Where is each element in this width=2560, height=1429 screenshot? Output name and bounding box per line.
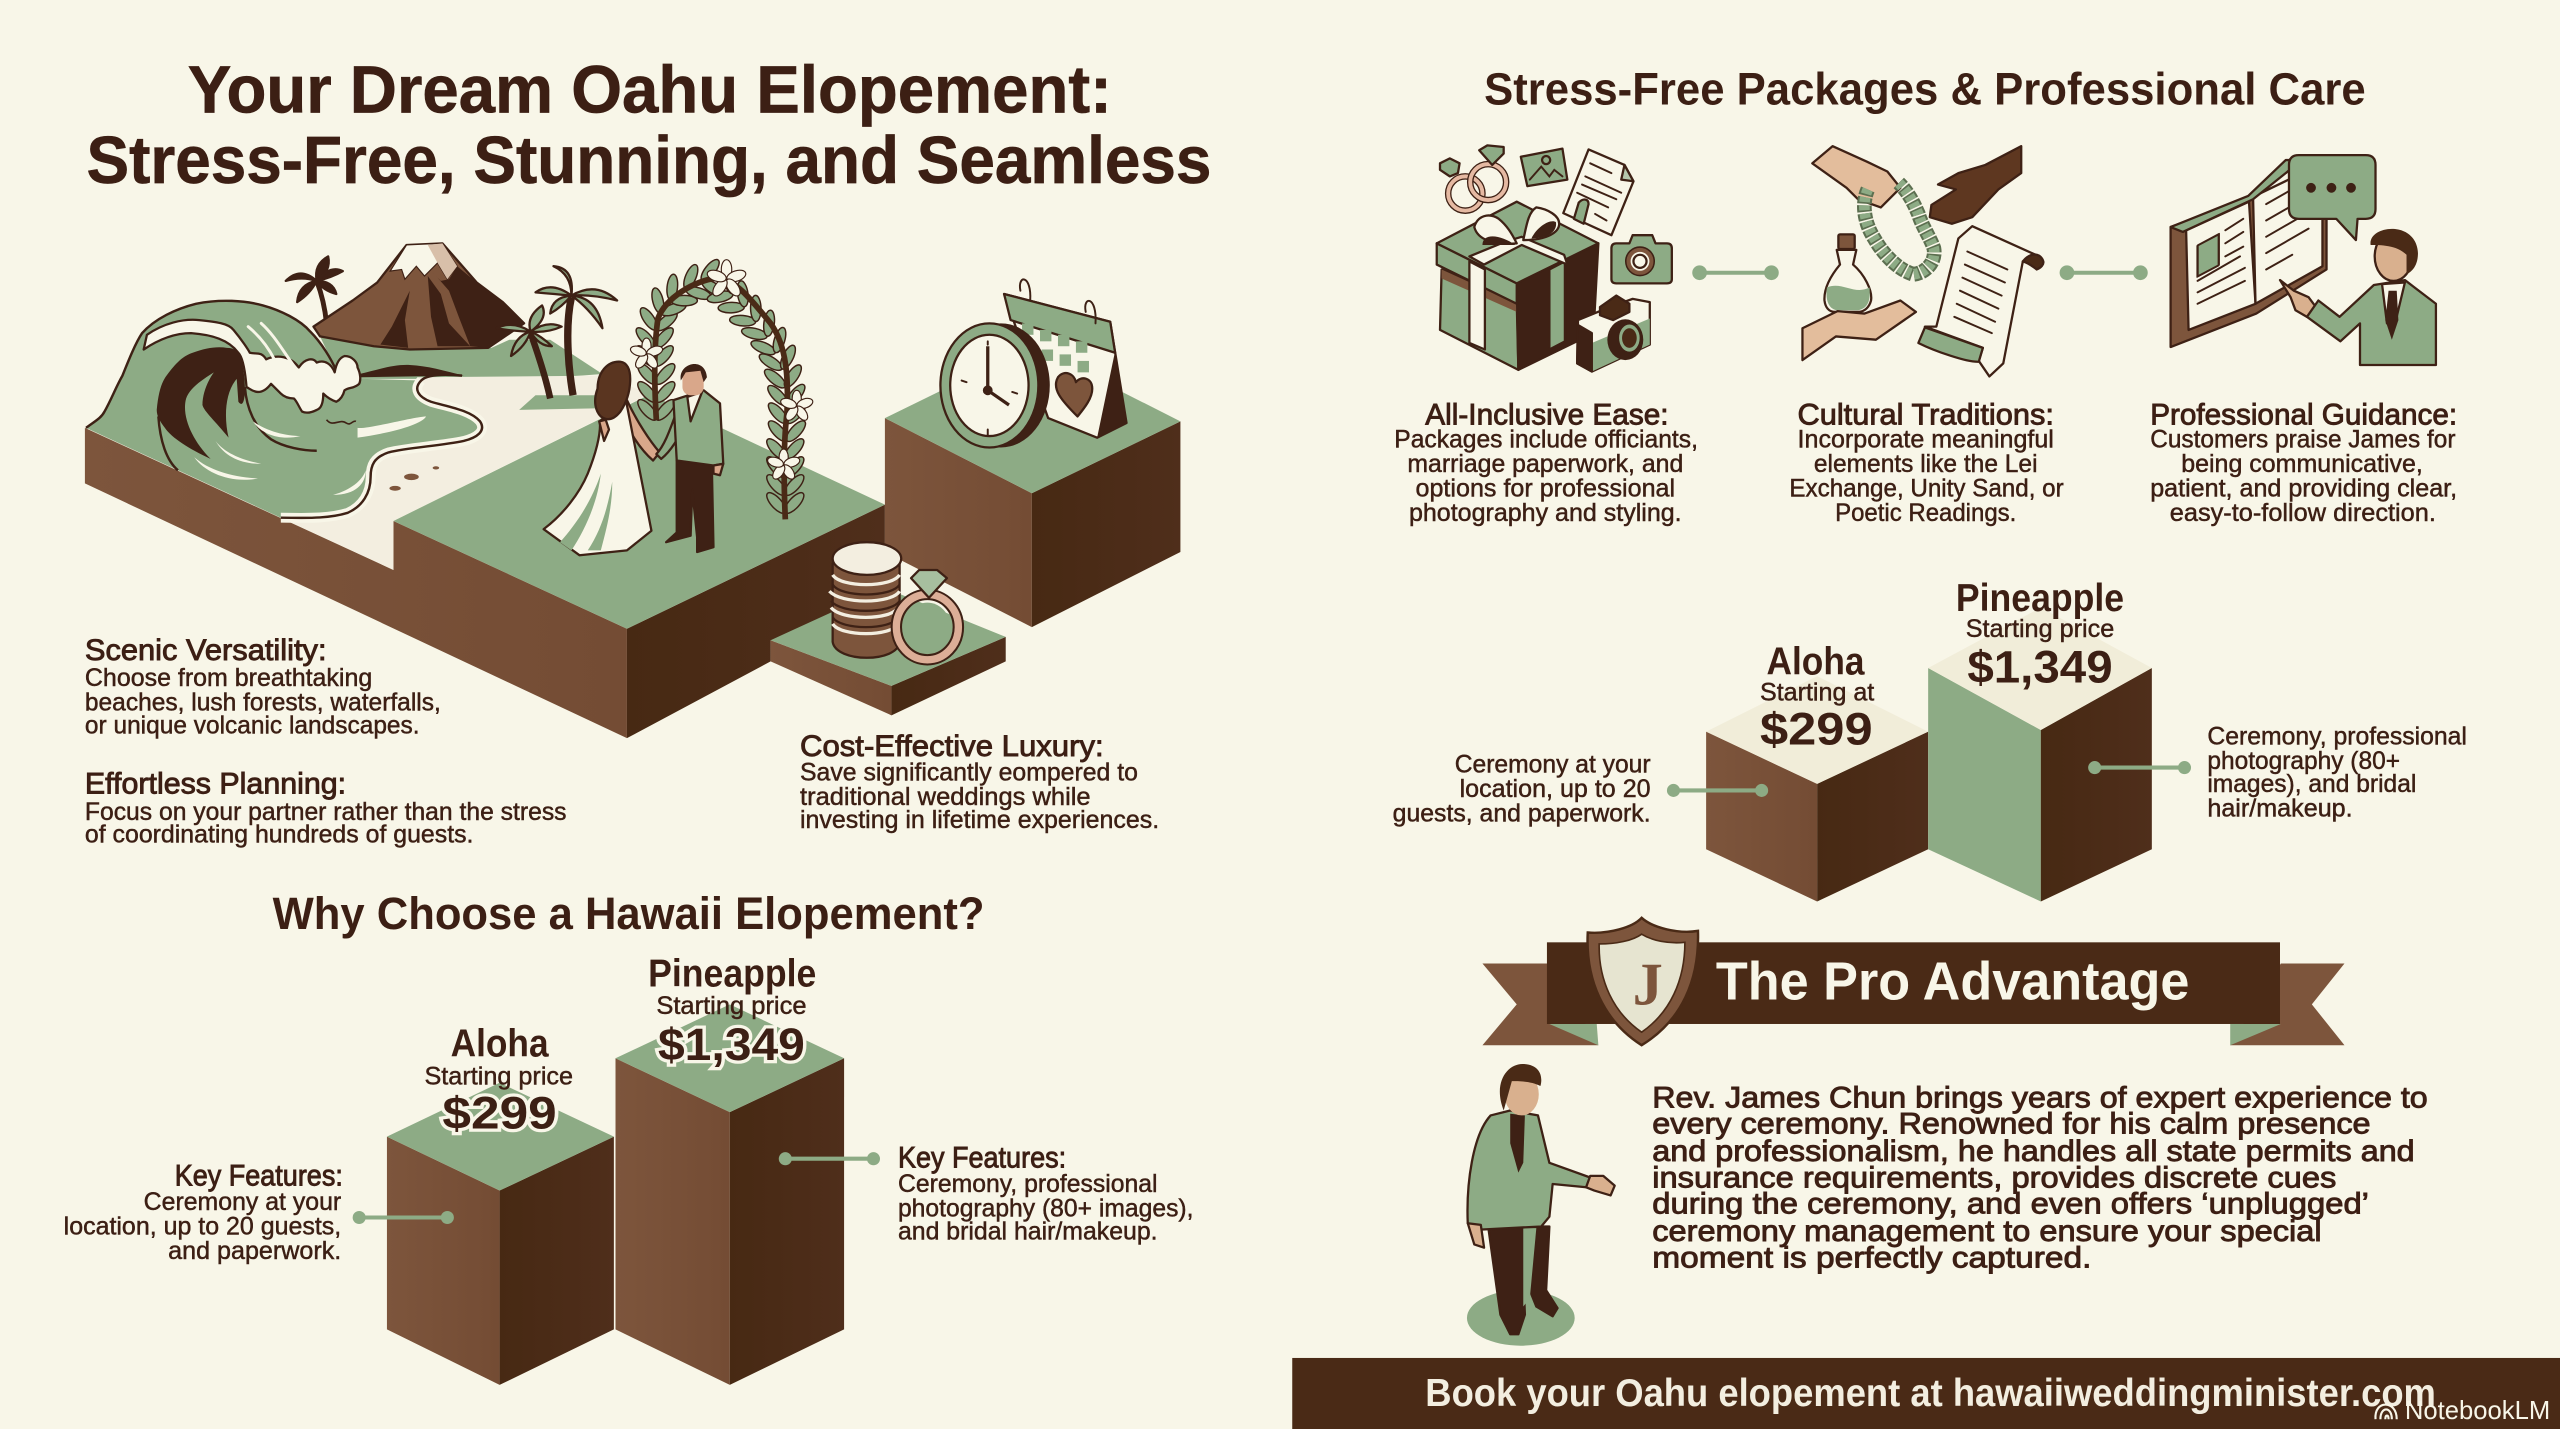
icon group: open book and guide (2171, 155, 2436, 365)
green lawn (393, 394, 885, 629)
text: Aloha key features: location, up to 20 guests, (64, 1213, 341, 1241)
icon group: gift, rings, photo, document, cameras (1437, 145, 1672, 372)
bride (544, 362, 660, 555)
icon: J shield: J (1633, 951, 1663, 1018)
text: All-Inclusive Ease: options for professional (1416, 474, 1675, 502)
pebbles (389, 466, 439, 491)
floral arch (629, 256, 814, 519)
palm patch (519, 395, 601, 410)
bar: Aloha (right): Starting at (1760, 679, 1874, 707)
text: Cultural Traditions: Incorporate meaningful (1798, 425, 2054, 453)
shoreline (281, 375, 482, 518)
text: Cultural Traditions: elements like the Lei (1814, 450, 2038, 478)
lei (1864, 183, 1934, 274)
text: Effortless Planning: Focus on your partner rather than the stress (85, 798, 567, 826)
banner: The Pro Advantage: The Pro Advantage (1716, 951, 2189, 1011)
text: Cultural Traditions (1789, 399, 2064, 527)
text: Cost-Effective Luxury (800, 730, 1159, 834)
text: Pro Advantage paragraph: and professionalism, he handles all state permits and (1652, 1135, 2415, 1168)
icon: wedding rings (1440, 145, 1506, 211)
groom (656, 364, 723, 552)
wave (86, 301, 426, 495)
icon: photo (1521, 149, 1567, 186)
text: Effortless Planning (85, 768, 567, 849)
figure: guide (2280, 229, 2436, 365)
text: right Pineapple features: images), and bridal (2207, 770, 2416, 798)
icon: document (1563, 149, 1633, 235)
text: right Pineapple features: photography (80+ (2207, 747, 2400, 775)
bar: Aloha (left): Starting price (424, 1062, 573, 1090)
text: Cost-Effective Luxury: Save significantly eompered to (800, 759, 1138, 787)
title (87, 53, 1211, 198)
hand: receiving dark (1930, 146, 2021, 224)
text: Scenic Versatility: Scenic Versatility: (85, 634, 327, 667)
connector: Aloha features (353, 1211, 454, 1224)
text: All-Inclusive Ease (1394, 399, 1698, 527)
icon: J shield (1588, 918, 1698, 1045)
text: Aloha key features: and paperwork. (168, 1237, 341, 1265)
text: All-Inclusive Ease: All-Inclusive Ease: (1425, 399, 1669, 432)
text: Effortless Planning: of coordinating hundreds of guests. (85, 821, 473, 849)
sand (281, 376, 650, 570)
connector: right Pineapple (2088, 761, 2191, 774)
figure: Rev. James Chun (1467, 1064, 1615, 1346)
text: Professional Guidance: patient, and providing clear, (2150, 474, 2457, 502)
icon: coin stack (829, 542, 901, 658)
platform left face (85, 428, 627, 738)
text: Professional Guidance (2150, 399, 2457, 527)
heading: why choose: Why Choose a Hawaii Elopement? (273, 888, 984, 939)
watermark: NotebookLM: NotebookLM (2405, 1395, 2550, 1425)
bar: Aloha (right): $299 (1760, 704, 1873, 755)
text: Pineapple key features: photography (80+ images), (898, 1195, 1193, 1223)
text: Pro Advantage paragraph: moment is perfectly captured. (1652, 1241, 2091, 1274)
text: right Aloha features: location, up to 20 (1460, 775, 1651, 803)
bar: Aloha (left): $299 (442, 1087, 557, 1139)
icon: big camera (1577, 296, 1650, 372)
connector: right Aloha (1667, 784, 1768, 797)
icon: small camera (1611, 235, 1672, 283)
connector 2 (2060, 265, 2148, 280)
small platform with coins and ring (771, 542, 1006, 715)
text: Pro Advantage paragraph: insurance requirements, provides discrete cues (1652, 1161, 2336, 1194)
text: Pro Advantage paragraph: Rev. James Chun brings years of expert experience to (1652, 1081, 2428, 1114)
icon: clock (940, 323, 1050, 447)
text: All-Inclusive Ease: marriage paperwork, and (1407, 450, 1683, 478)
text: Aloha key features (64, 1160, 343, 1265)
hills behind the water (320, 335, 602, 379)
text: right Aloha features: guests, and paperwork. (1393, 799, 1651, 827)
text: Pro Advantage paragraph (1652, 1081, 2428, 1274)
text: right Pineapple features: hair/makeup. (2207, 795, 2353, 823)
small dark palm (286, 256, 343, 323)
text: Pro Advantage paragraph: every ceremony. Renowned for his calm presence (1652, 1107, 2371, 1140)
bar: Pineapple (left): $1,349 (658, 1019, 805, 1070)
text: Pineapple key features: Key Features: (898, 1142, 1066, 1175)
text: Scenic Versatility: Choose from breathtaking (85, 664, 372, 692)
text: All-Inclusive Ease: photography and styling. (1409, 499, 1682, 527)
text: Effortless Planning: Effortless Planning: (85, 768, 346, 801)
isometric scene: Oahu landscape with couple (85, 243, 885, 738)
footer bar: Book your Oahu elopement at hawaiiweddingminister.com (1425, 1372, 2436, 1415)
bar: Aloha (left) (387, 1023, 614, 1385)
connector 1 (1692, 265, 1779, 280)
icon: open book (2171, 160, 2327, 347)
text: Professional Guidance: being communicative, (2181, 450, 2423, 478)
text: Scenic Versatility: beaches, lush forests, waterfalls, (85, 688, 441, 716)
title: Your Dream Oahu Elopement: (188, 53, 1112, 128)
icon group: lei exchange, bottle, scroll (1802, 146, 2043, 376)
text: Professional Guidance: easy-to-follow direction. (2170, 499, 2436, 527)
footer bar (1292, 1358, 2560, 1429)
text: Pineapple key features: Ceremony, professional (898, 1170, 1158, 1198)
text: Cultural Traditions: Poetic Readings. (1835, 499, 2016, 527)
title: Stress-Free, Stunning, and Seamless (87, 123, 1211, 198)
text: Cultural Traditions: Exchange, Unity Sand, or (1789, 474, 2064, 502)
bar: Pineapple (left): Starting price (656, 992, 807, 1020)
unity sand bottle (1824, 234, 1871, 312)
text: All-Inclusive Ease: Packages include officiants, (1394, 425, 1698, 453)
mountain (313, 243, 524, 349)
text: Professional Guidance: Customers praise James for (2150, 425, 2456, 453)
text: Pro Advantage paragraph: ceremony management to ensure your special (1652, 1215, 2322, 1248)
text: Cultural Traditions: Cultural Traditions: (1798, 399, 2054, 432)
bar: Pineapple (right): Pineapple (1956, 577, 2124, 620)
connector: Pineapple features (779, 1152, 880, 1165)
bar: Pineapple (right): $1,349 (1967, 642, 2113, 693)
text: Pineapple key features (898, 1142, 1193, 1246)
bar: Pineapple (left): Pineapple (648, 952, 816, 995)
text: right Aloha features: Ceremony at your (1455, 750, 1651, 778)
bar: Pineapple (left) (616, 952, 844, 1385)
text: right Aloha features (1393, 750, 1651, 827)
text: Scenic Versatility: or unique volcanic landscapes. (85, 711, 420, 739)
text: Pro Advantage paragraph: during the ceremony, and even offers ‘unplugged’ (1652, 1187, 2369, 1220)
hand: giving (1812, 146, 1900, 207)
text: Scenic Versatility (85, 634, 441, 739)
tower platform with clock and calendar (885, 279, 1180, 627)
water (86, 301, 482, 518)
icon: speech bubble (2289, 155, 2376, 240)
platform right face (627, 505, 885, 738)
bar: Pineapple (right) (1928, 577, 2152, 901)
green palm trees (496, 266, 617, 398)
bar: Pineapple (right): Starting price (1966, 615, 2114, 643)
banner: The Pro Advantage (1482, 918, 2344, 1045)
text: Pineapple key features: and bridal hair/makeup. (898, 1218, 1158, 1246)
text: Aloha key features: Ceremony at your (144, 1188, 341, 1216)
heading: stress-free packages: Stress-Free Packages & Professional Care (1484, 64, 2366, 115)
scroll (1918, 226, 2043, 376)
text: right Pineapple features: Ceremony, professional (2207, 723, 2467, 751)
icon: calendar (1004, 279, 1127, 438)
hand: lower (1802, 300, 1916, 360)
bar: Aloha (left): Aloha (451, 1023, 550, 1066)
icon: gift box (1437, 202, 1598, 370)
text: right Pineapple features (2207, 723, 2467, 823)
bar: Aloha (right) (1706, 640, 1928, 901)
text: Cost-Effective Luxury: traditional weddings while (800, 783, 1091, 811)
text: Professional Guidance: Professional Guidance: (2150, 399, 2457, 432)
bar: Aloha (right): Aloha (1767, 640, 1866, 683)
text: Aloha key features: Key Features: (175, 1160, 343, 1193)
icon: diamond ring (896, 570, 958, 660)
mound (359, 365, 464, 377)
text: Cost-Effective Luxury: investing in lifetime experiences. (800, 806, 1159, 834)
text: Cost-Effective Luxury: Cost-Effective Luxury: (800, 730, 1104, 763)
